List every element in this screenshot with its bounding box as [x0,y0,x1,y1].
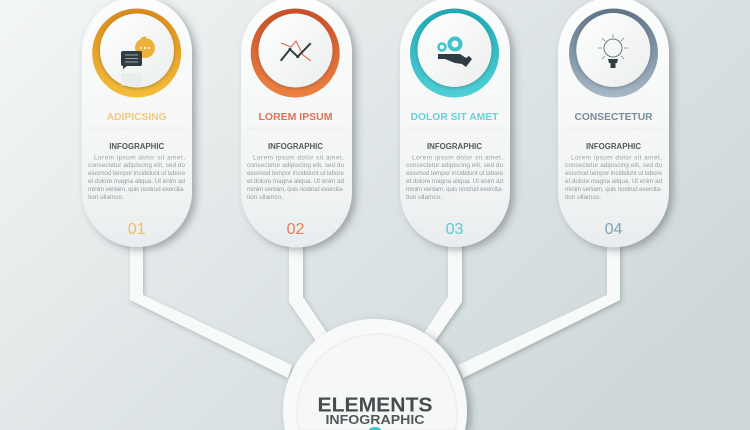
card 4 body text: consectetur adipiscing elit, sed do [565,162,662,169]
card 1 number: 01 [128,221,146,238]
card 1 body text: et dolore magna aliqua. Ut enim ad [88,178,185,185]
hub title: ELEMENTS [318,394,432,416]
card 1 subheading: INFOGRAPHIC [109,142,164,151]
card 1 body text: minim veniam, quis nostrud exercita- [88,186,185,193]
card 3 body text: eiusmod tempor incididunt ut labore [406,170,503,177]
card 4 body text: eiusmod tempor incididunt ut labore [565,170,662,177]
card 1 body text [88,154,185,201]
card 1 body text: eiusmod tempor incididunt ut labore [88,170,185,177]
card 3 body text: et dolore magna aliqua. Ut enim ad [406,178,503,185]
icon: chat bubbles [121,36,155,86]
card 1 body text: Lorem ipsum dolor sit amet, [94,154,185,162]
card 3 body text: minim veniam, quis nostrud exercita- [406,186,503,193]
card 4 subheading: INFOGRAPHIC [586,142,641,151]
card 1 body text: tion ullamco. [88,194,124,201]
panel: card 3 [400,0,510,247]
panel: card 2 [241,0,352,247]
card 3 body text [406,154,503,201]
ring 2 [251,8,340,98]
connectors from cards to hub [130,240,620,378]
separator 1 [88,127,186,130]
card 3 body text: consectetur adipiscing elit, sed do [406,162,503,169]
card 4 body text: minim veniam, quis nostrud exercita- [565,186,662,193]
card 1 body text: consectetur adipiscing elit, sed do [88,162,185,169]
card 2 heading: LOREM IPSUM [258,111,333,123]
central hub [283,319,467,430]
card 3 number: 03 [446,221,464,238]
card 2 body text: et dolore magna aliqua. Ut enim ad [247,178,344,185]
card 3 heading: DOLOR SIT AMET [410,111,499,123]
card 4 body text: et dolore magna aliqua. Ut enim ad [565,178,662,185]
ring 3 [410,8,499,98]
card 2 body text: minim veniam, quis nostrud exercita- [247,186,344,193]
card 2 body text: consectetur adipiscing elit, sed do [247,162,344,169]
card 4 body text: tion ullamco. [565,194,601,201]
card 4 heading: CONSECTETUR [574,111,653,123]
card 2 body text: eiusmod tempor incididunt ut labore [247,170,344,177]
card 2 subheading: INFOGRAPHIC [268,142,323,151]
icon: line chart [281,41,311,61]
card 4 body text: Lorem ipsum dolor sit amet, [571,154,662,162]
card 2 body text: Lorem ipsum dolor sit amet, [253,154,344,162]
card 2 body text [247,154,344,201]
card 3 body text: tion ullamco. [406,194,442,201]
icon: light bulb [598,34,628,68]
hub icon hint [369,427,381,430]
card 1 heading: ADIPICSING [107,111,167,123]
card 2 number: 02 [287,221,304,238]
hub subtitle: INFOGRAPHIC [326,412,425,427]
ring 1 [92,8,181,98]
panel: card 4 [558,0,669,247]
card 4 body text [565,154,662,201]
separator 4 [565,127,663,130]
separator 2 [247,127,345,130]
card 4 number: 04 [605,221,622,238]
card 3 subheading: INFOGRAPHIC [427,142,482,151]
card 3 body text: Lorem ipsum dolor sit amet, [412,154,503,162]
icon: hand with gears [438,38,472,67]
ring 4 [569,8,658,98]
panel: card 1 [82,0,192,247]
card 2 body text: tion ullamco. [247,194,283,201]
separator 3 [406,127,504,130]
